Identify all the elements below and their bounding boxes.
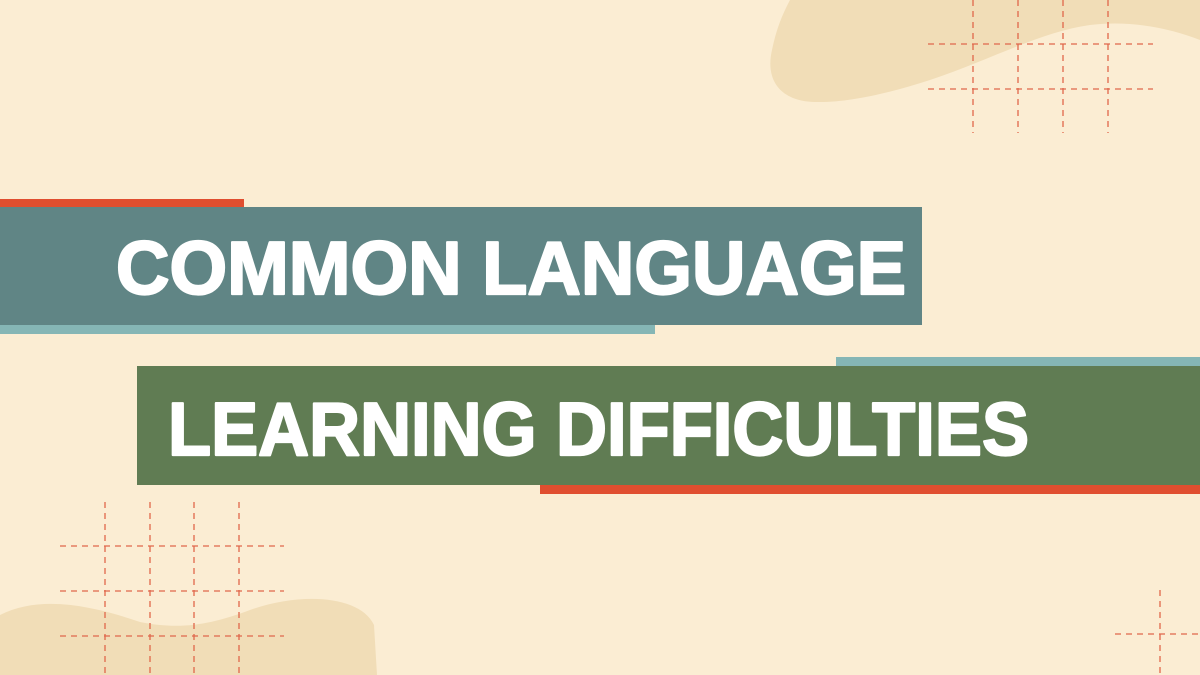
dashed grid: bottom left	[60, 502, 284, 675]
accent bar: light teal above banner 2	[836, 357, 1200, 366]
accent bar: light teal under banner 1	[0, 325, 655, 334]
decorative blob: top right	[770, 0, 1200, 102]
accent bar: red top	[0, 199, 244, 209]
title text line 1: COMMON LANGUAGE	[116, 226, 906, 310]
decorative blob: bottom left	[0, 599, 377, 675]
title banner: learning difficulties	[137, 366, 1200, 485]
dashed grid: top right	[928, 0, 1153, 133]
accent bar: red bottom	[540, 485, 1200, 494]
title banner: common language	[0, 207, 922, 325]
dashed grid: bottom right	[1115, 590, 1200, 675]
title text line 2: LEARNING DIFFICULTIES	[168, 387, 1029, 471]
